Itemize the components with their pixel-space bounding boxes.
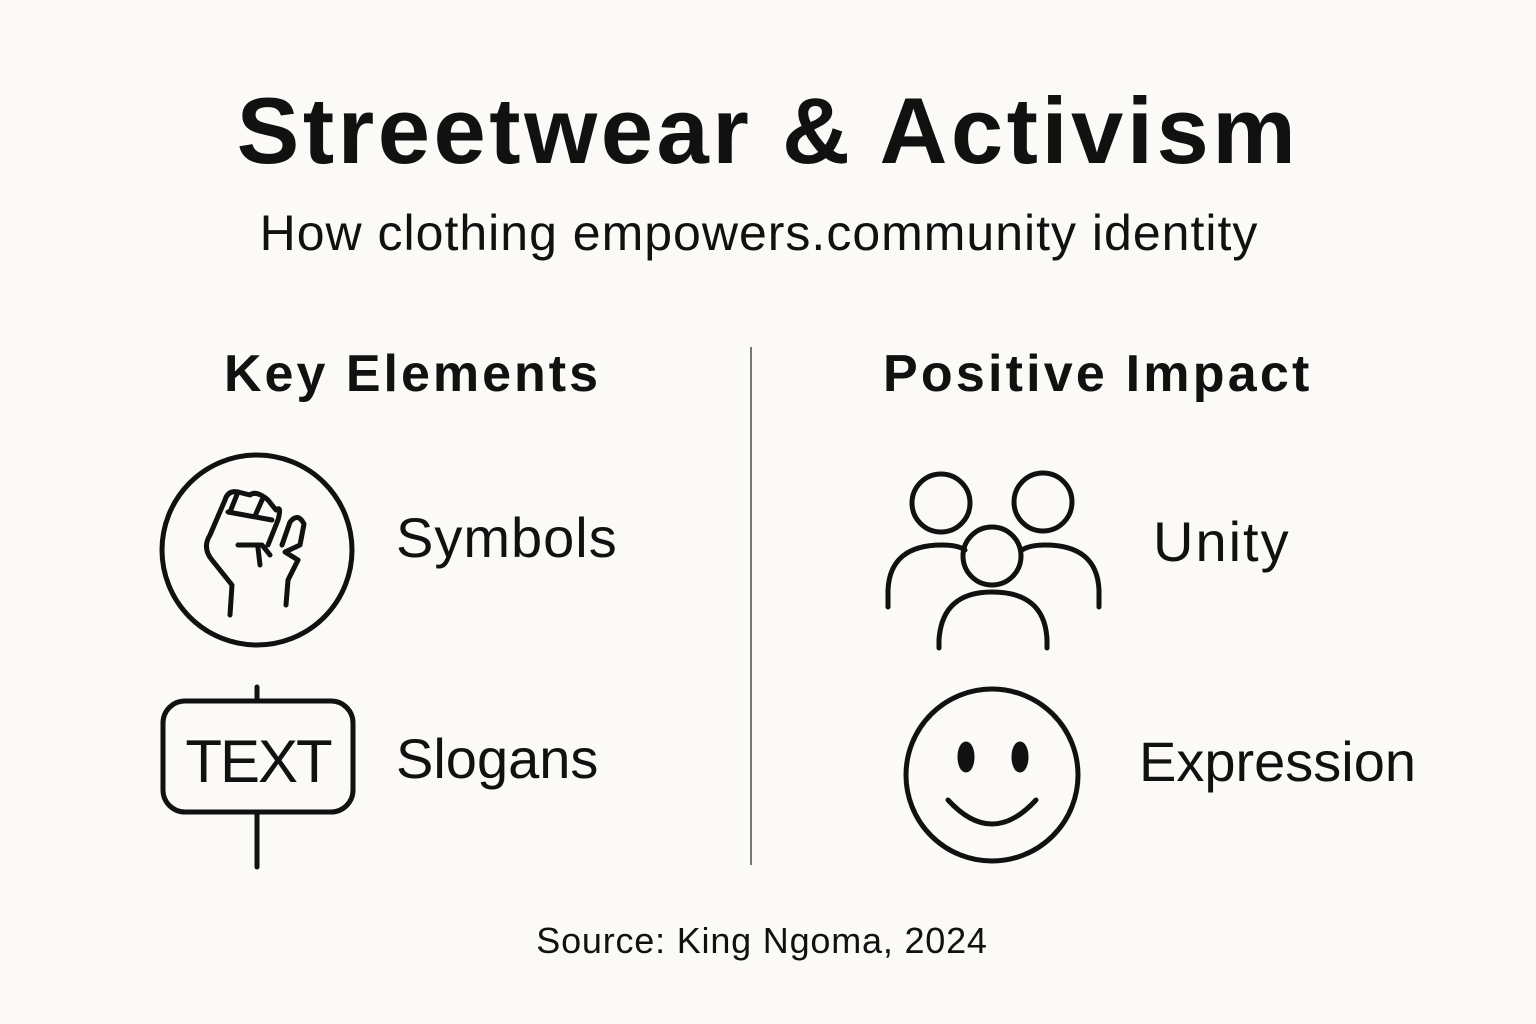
divider (750, 347, 752, 865)
label: unity: Unity (1153, 510, 1291, 573)
subtitle: How clothing empowers.community identity (260, 205, 1258, 261)
icon: people (888, 473, 1099, 648)
heading: positive impact: Positive Impact (883, 345, 1312, 403)
icon: sign (163, 687, 353, 867)
icon: sign: TEXT (185, 728, 332, 795)
label: slogans: Slogans (396, 727, 598, 790)
icon: smiley (906, 689, 1078, 861)
source: Source: King Ngoma, 2024 (536, 920, 988, 961)
label: symbols: Symbols (396, 506, 618, 569)
title: Streetwear & Activism (237, 78, 1299, 183)
label: expression: Expression (1139, 730, 1416, 793)
icon: fist (162, 455, 352, 645)
heading: key elements: Key Elements (224, 345, 601, 403)
